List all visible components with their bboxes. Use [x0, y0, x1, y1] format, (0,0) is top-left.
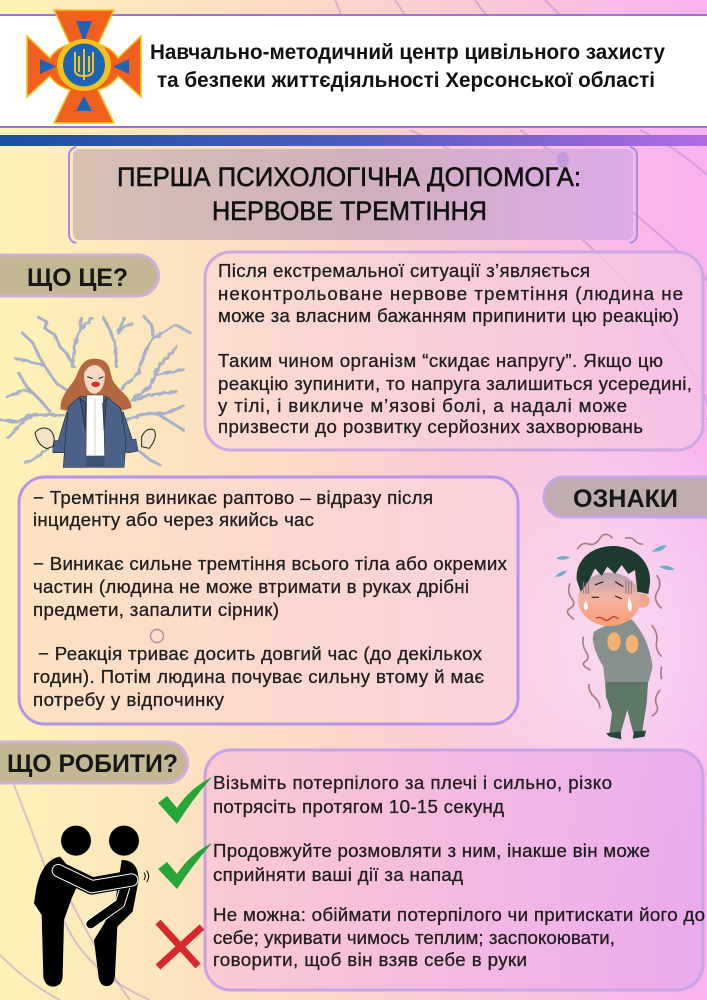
right figure arm: [91, 877, 128, 924]
shiver lines: [567, 534, 662, 716]
face: [578, 573, 641, 626]
left figure arm: [60, 871, 130, 886]
header organisation text: та безпеки життєдіяльності Херсонської області: [157, 69, 655, 92]
panel: signs text: − Реакція триває досить довгий час (до декількох: [38, 643, 483, 664]
title panel: [69, 147, 637, 243]
heading pill: signs: ОЗНАКИ: [573, 485, 678, 513]
panel: what is it text: Таким чином організм “скидає напругу”. Якщо цю: [218, 350, 663, 371]
icon: green check 2: [158, 843, 212, 889]
panel: signs text: годин). Потім людина почуває сильну втому й має: [33, 666, 484, 687]
panel: signs text: [19, 477, 518, 724]
shirt: [86, 395, 105, 456]
panel: what is it text: призвести до розвитку серйозних захворювань: [218, 416, 643, 437]
heading pill: what is it: ЩО ЦЕ?: [27, 264, 128, 292]
icon: red cross: [158, 922, 202, 967]
heading pill: what is it: [0, 255, 158, 296]
sweater: [593, 619, 653, 682]
right figure body: [94, 860, 138, 986]
panel: what to do text: Не можна: обіймати потерпілого чи притискати його до: [213, 904, 705, 925]
panel: what to do text: потрясіть протягом 10-15 секунд: [213, 796, 504, 817]
header organisation text: Навчально-методичний центр цивільного захисту: [150, 41, 665, 64]
icon: green check 1: [158, 777, 212, 824]
heading pill: what to do: ЩО РОБИТИ?: [7, 750, 178, 778]
icon: emergency service cross emblem: [27, 10, 141, 123]
lightning bolts: [0, 317, 190, 465]
panel: what is it text: Після екстремальної ситуації з’являється: [218, 260, 590, 281]
panel: signs text: частин (людина не може втримати в руках дрібні: [33, 576, 469, 597]
trousers: [605, 679, 648, 733]
hair: [577, 546, 650, 594]
header band: [0, 14, 707, 146]
heading pill: signs: [544, 477, 707, 517]
illustration: person shaking another by the shoulders: [34, 826, 149, 987]
heading pill: what to do: [0, 742, 188, 783]
panel: signs text: інциденту або через якийсь час: [33, 509, 314, 530]
left figure body: [34, 857, 80, 987]
panel: what is it text: у тілі, і викличе м’язові болі, а надалі може: [218, 395, 627, 416]
panel: what to do text: Візьміть потерпілого за плечі і сильно, різко: [213, 772, 612, 793]
panel: what is it text: неконтрольоване нервове тремтіння (людина не: [218, 283, 683, 304]
illustration: woman with lightning: [0, 317, 190, 467]
jacket: [63, 397, 126, 467]
panel: what to do text: сприйняти ваші дії за напад: [213, 864, 463, 885]
face: [84, 365, 105, 394]
panel: what to do text: [205, 750, 705, 990]
jacket sleeves: [53, 413, 73, 447]
illustration: shivering boy: [555, 534, 675, 739]
hands: [35, 428, 54, 449]
panel: signs text: − Тремтіння виникає раптово – відразу після: [33, 487, 433, 508]
panel: signs text: предмети, запалити сірник): [33, 599, 279, 620]
title: НЕРВОВЕ ТРЕМТІННЯ: [212, 196, 487, 226]
panel: what is it text: може за власним бажанням припинити цю реакцію): [218, 305, 679, 326]
header organisation text: [150, 41, 665, 92]
eyes and mouth: [592, 582, 623, 599]
panel: what to do text: говорити, щоб він взяв себе в руки: [213, 949, 527, 970]
ear: [636, 594, 650, 608]
panel: signs text: − Виникає сильне тремтіння всього тіла або окремих: [33, 553, 508, 574]
panel: what to do text: Продовжуйте розмовляти з ним, інакше він може: [213, 840, 650, 861]
hands: [607, 632, 621, 651]
hair: [61, 359, 131, 413]
title: ПЕРША ПСИХОЛОГІЧНА ДОПОМОГА:: [117, 162, 581, 192]
sweat drops: [555, 545, 675, 577]
panel: what to do text: себе; укривати чимось теплим; заспокоювати,: [213, 927, 615, 948]
panel: what is it text: [205, 252, 703, 450]
title: [117, 162, 581, 226]
panel: what is it text: реакцію зупинити, то напруга залишиться усередині,: [218, 373, 692, 394]
panel: signs text: потребу у відпочинку: [33, 689, 225, 710]
